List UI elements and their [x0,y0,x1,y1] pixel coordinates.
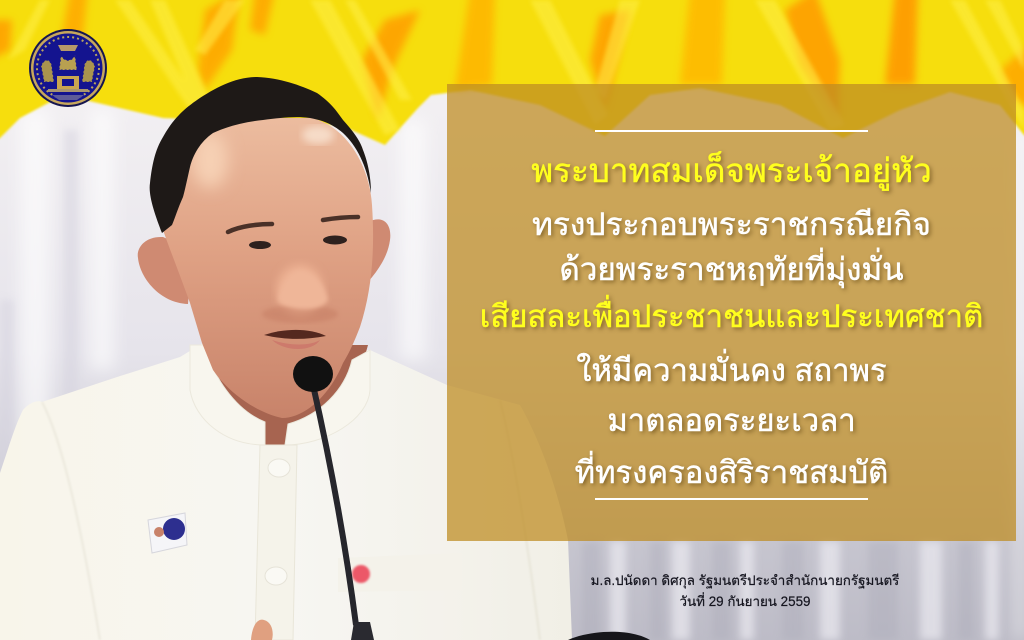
ears [138,219,390,304]
quote line 7: ที่ทรงครองสิริราชสมบัติ [575,455,888,490]
placket [255,445,297,640]
portrait: suit [0,343,572,640]
hair [150,77,371,233]
quote line 1: พระบาทสมเด็จพระเจ้าอยู่หัว [531,153,932,190]
panel: quote [447,84,1016,541]
face [163,118,373,418]
nose [278,270,328,309]
red pin [352,565,370,583]
credit [591,573,899,609]
pocket [338,553,462,592]
badge [148,513,187,553]
emblem [29,29,107,107]
buttons [265,459,290,585]
dark object bottom [568,632,650,640]
quote line 5: ให้มีความมั่นคง สถาพร [576,353,887,388]
portrait: head [138,77,390,418]
yellow satin drape [0,0,1024,150]
eyes [249,236,347,249]
brows [228,217,358,232]
quote line 3: ด้วยพระราชหฤทัยที่มุ่งมั่น [559,252,904,287]
microphone [293,356,374,640]
neck [205,345,368,448]
hand [251,620,273,640]
mouth [264,330,326,349]
quote line 4: เสียสละเพื่อประชาชนและประเทศชาติ [480,299,983,334]
quote line 2: ทรงประกอบพระราชกรณียกิจ [532,206,931,242]
collar [190,345,370,445]
credit: ม.ล.ปนัดดา ดิศกุล รัฐมนตรีประจำสำนักนายกรัฐมนตรี [591,573,899,588]
quote line 6: มาตลอดระยะเวลา [607,403,856,438]
credit: วันที่ 29 กันยายน 2559 [680,594,810,609]
